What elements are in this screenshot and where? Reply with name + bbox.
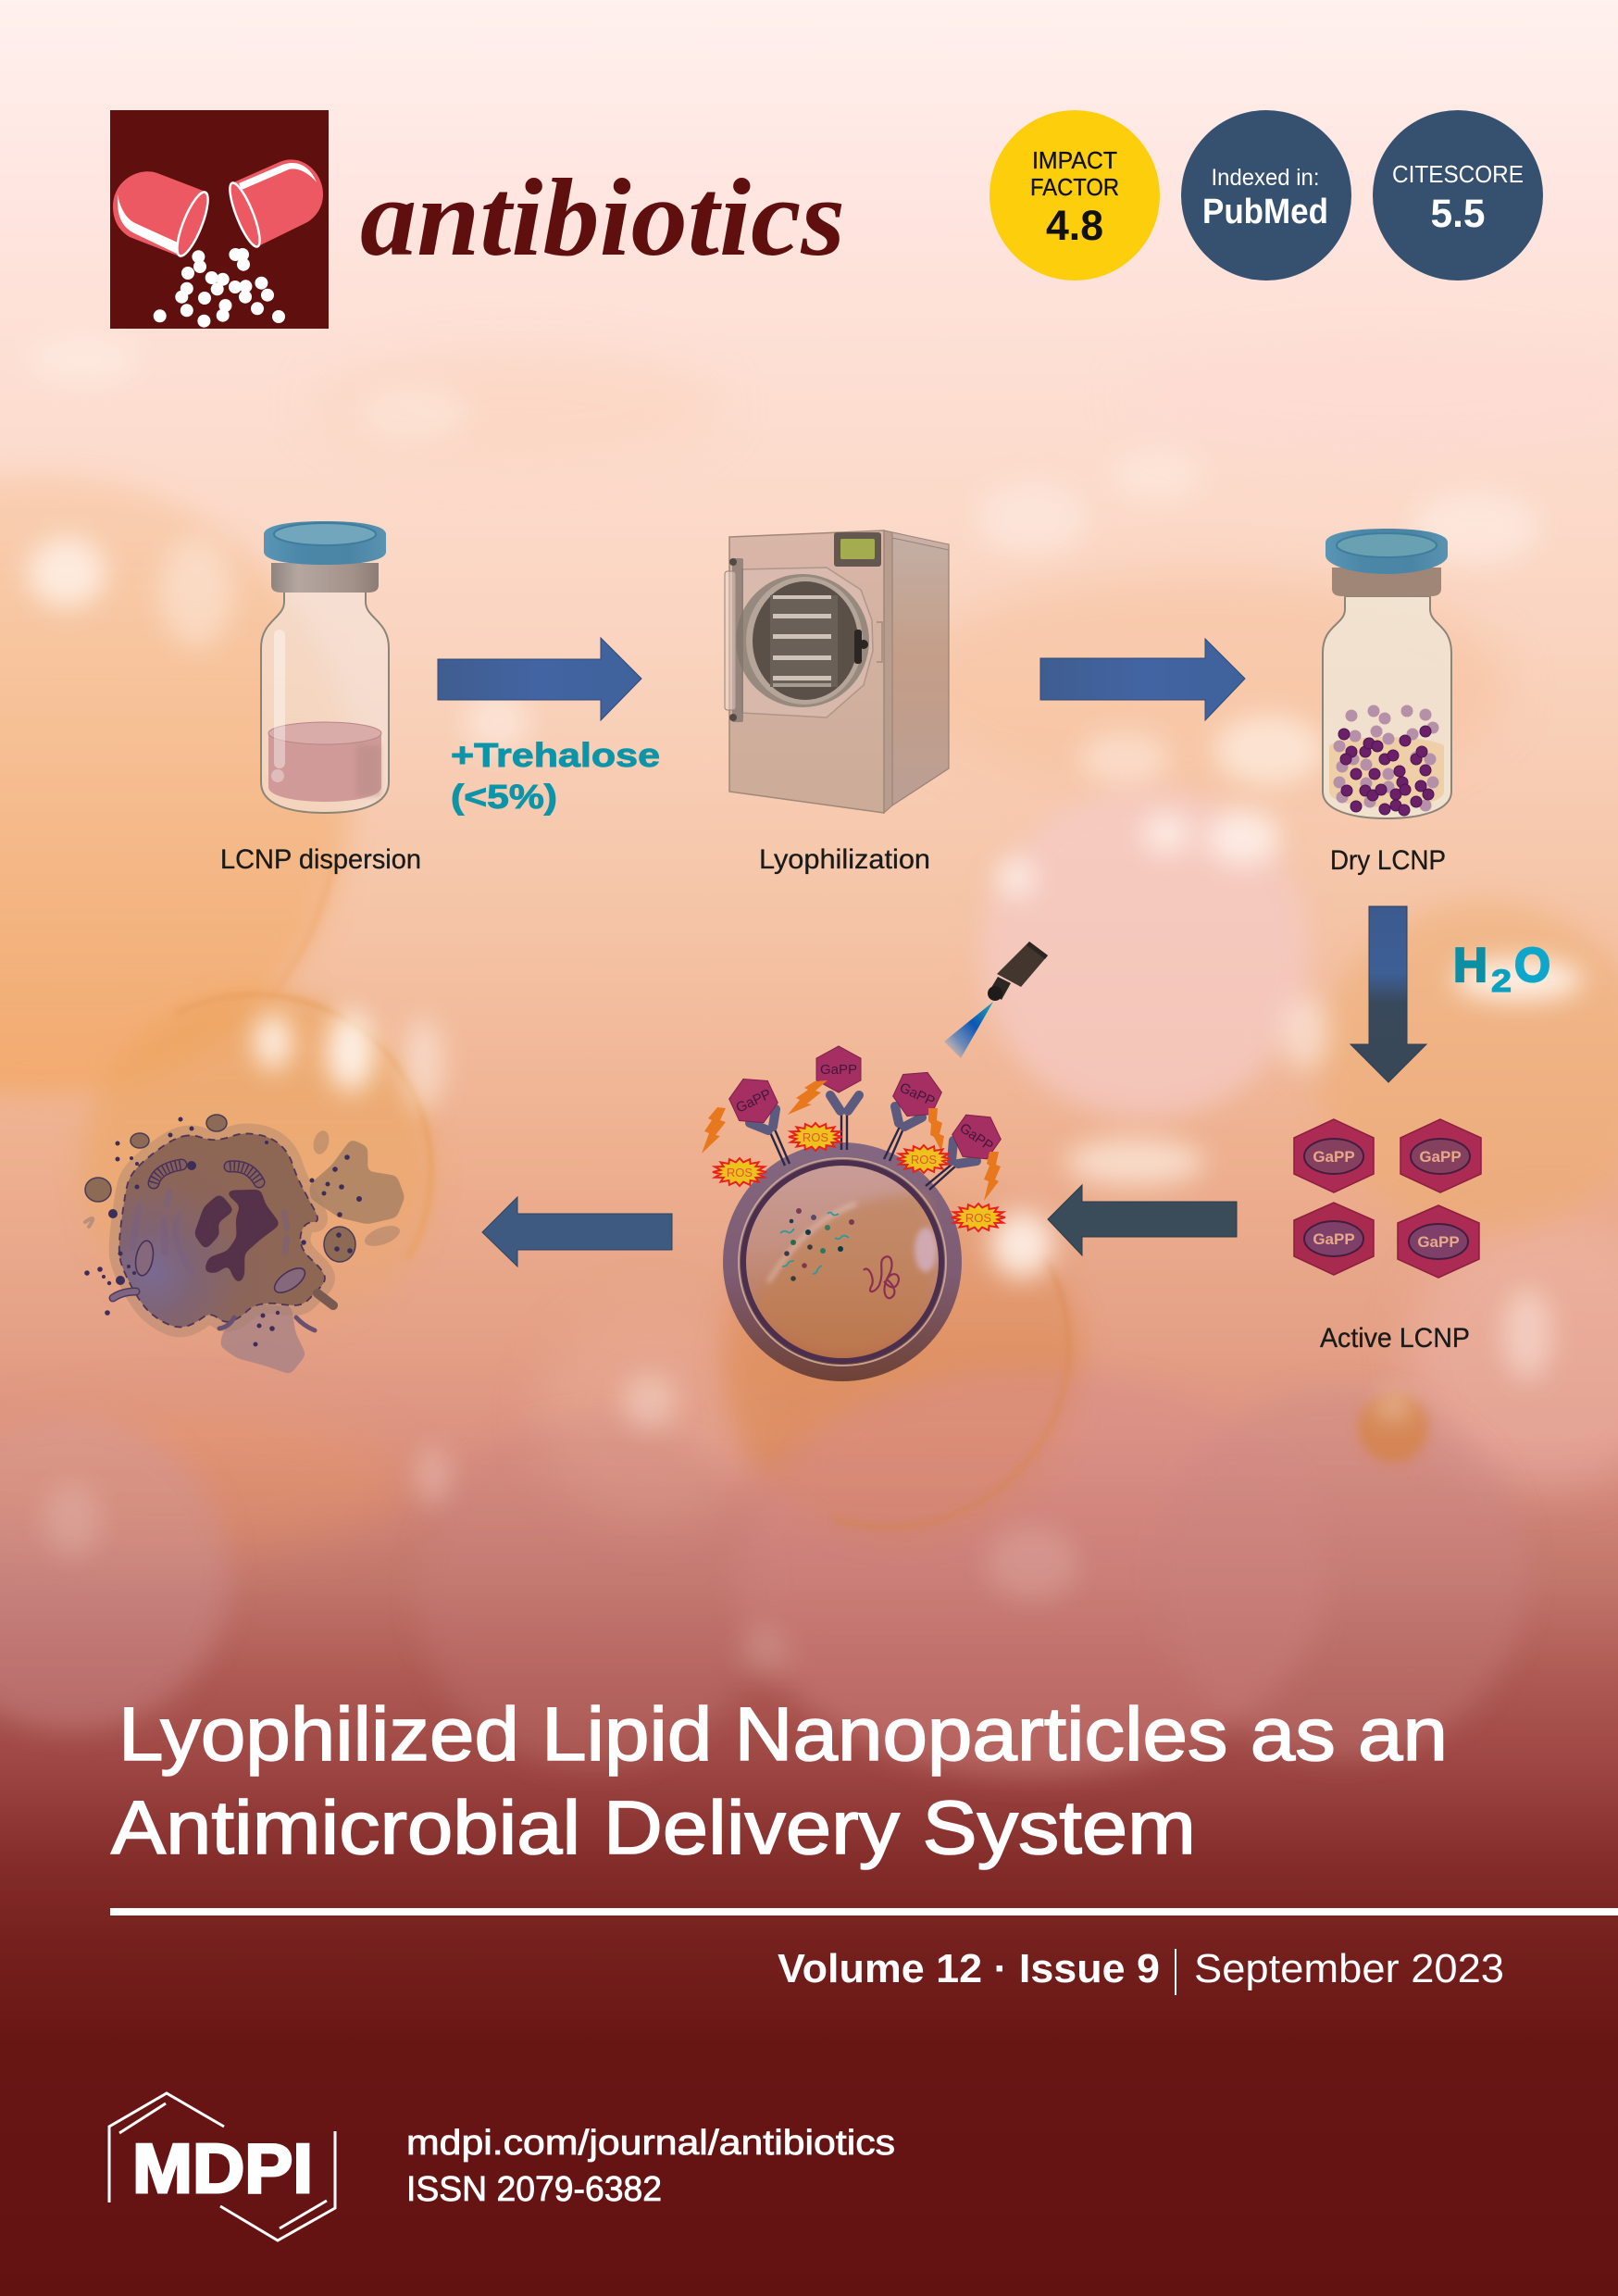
arrow: cell to dying cell (482, 1197, 672, 1267)
journal URL and ISSN (406, 2124, 895, 2209)
cytoplasm dots (780, 1208, 854, 1281)
icon: left capsule half (113, 171, 214, 259)
icon: dry LCNP vial (1323, 529, 1451, 818)
hexagon 1 (1294, 1119, 1374, 1192)
arrow: active LCNP to cell (1048, 1185, 1237, 1255)
endoplasmic reticulum streaks (132, 1192, 287, 1271)
ROS burst 1 (713, 1158, 766, 1186)
cell body (723, 1142, 962, 1381)
badge: indexed in PubMed: Indexed in: (1211, 165, 1320, 191)
label: Dry LCNP: Dry LCNP (1330, 845, 1446, 876)
lightning bolts (702, 1080, 1001, 1201)
DNA strand (864, 1256, 899, 1298)
antibody 1 (750, 1109, 790, 1166)
journal URL and ISSN: ISSN 2079-6382 (406, 2170, 662, 2209)
nucleus (196, 1192, 278, 1281)
issue line (778, 1946, 1504, 1995)
journal logo: capsule icon (110, 110, 329, 329)
arrow: vial to lyophilizer (438, 638, 641, 720)
label: Lyophilization: Lyophilization (759, 844, 930, 875)
hexagon 4: GaPP (1417, 1233, 1460, 1251)
icon: target cell with receptors (702, 1046, 1008, 1381)
hexagon 3 (1294, 1203, 1374, 1275)
badge: indexed in PubMed (1181, 110, 1351, 281)
arrow: water addition down (1350, 906, 1426, 1082)
label: Active LCNP: Active LCNP (1320, 1323, 1470, 1354)
icon: freeze dryer (725, 530, 949, 813)
GaPP peptide hexagons (724, 1046, 1008, 1168)
badge: indexed in PubMed: PubMed (1202, 193, 1328, 231)
ROS burst 4 (952, 1204, 1005, 1231)
ROS burst 3 (897, 1145, 951, 1173)
ROS burst 2: ROS (803, 1130, 828, 1144)
badge: impact factor: 4.8 (1046, 202, 1103, 249)
expelled cytoplasm right (312, 1142, 403, 1222)
icon: active LCNP hexagons (1294, 1119, 1481, 1278)
mitochondria (154, 1165, 259, 1183)
GaPP peptide hexagons: GaPP (733, 1086, 774, 1117)
label: H2O: H (1453, 939, 1487, 992)
icon: LCNP dispersion vial (261, 521, 389, 813)
expelled cytoplasm bottom (222, 1305, 304, 1372)
publisher logo: MDPI (109, 2093, 335, 2240)
GaPP peptide hexagons: GaPP (897, 1079, 938, 1110)
ROS burst 1: ROS (727, 1166, 753, 1179)
label: +Trehalose (<5%) (451, 736, 660, 816)
arrow: lyophilizer to dry vial (1040, 639, 1245, 720)
journal URL and ISSN: mdpi.com/journal/antibiotics (406, 2124, 895, 2163)
divider rule (110, 1908, 1618, 1915)
icon: pill granules (154, 248, 285, 328)
badge: impact factor: FACTOR (1030, 173, 1119, 201)
publisher logo: MDPI: MDPI (132, 2129, 313, 2207)
title: Lyophilized Lipid Nanoparticles as an (118, 1692, 1448, 1777)
bubble rims (139, 861, 1068, 1527)
title: Antimicrobial Delivery System (111, 1786, 1196, 1870)
label: H2O (1453, 939, 1550, 999)
journal name: antibiotics (360, 156, 845, 279)
badge: citescore: CITESCORE (1392, 160, 1524, 188)
ROS burst 4: ROS (965, 1211, 991, 1225)
label: +Trehalose (<5%): +Trehalose (451, 736, 660, 774)
GaPP peptide hexagons: GaPP (820, 1062, 857, 1078)
icon: dying bacterial cell (84, 1115, 403, 1372)
ROS burst 2 (789, 1123, 842, 1151)
antibody 3 (884, 1106, 922, 1161)
hexagon 3: GaPP (1313, 1230, 1355, 1248)
hexagon 2 (1400, 1119, 1481, 1192)
cell debris (85, 1115, 355, 1262)
GaPP peptide hexagons: GaPP (956, 1120, 996, 1154)
title (111, 1692, 1448, 1870)
label: +Trehalose (<5%): (<5%) (451, 778, 557, 816)
badge: impact factor: IMPACT (1032, 146, 1117, 174)
label: H2O: 2 (1491, 964, 1512, 999)
label: H2O: O (1514, 939, 1550, 992)
issue line: Volume 12 · Issue 9 (778, 1946, 1160, 1991)
icon: right capsule half (224, 159, 323, 250)
badge: citescore (1373, 110, 1543, 281)
hexagon 1: GaPP (1313, 1148, 1355, 1166)
antibody 2 (830, 1095, 859, 1150)
antibody 4 (926, 1141, 977, 1190)
icon: spray nozzle (944, 942, 1048, 1058)
hexagon 4 (1398, 1205, 1479, 1278)
issue line: September 2023 (1194, 1946, 1504, 1991)
badge: citescore: 5.5 (1431, 192, 1485, 236)
ROS burst 3: ROS (911, 1153, 937, 1167)
badge: impact factor (989, 110, 1160, 281)
hexagon 2: GaPP (1419, 1148, 1462, 1166)
label: LCNP dispersion: LCNP dispersion (220, 844, 421, 875)
